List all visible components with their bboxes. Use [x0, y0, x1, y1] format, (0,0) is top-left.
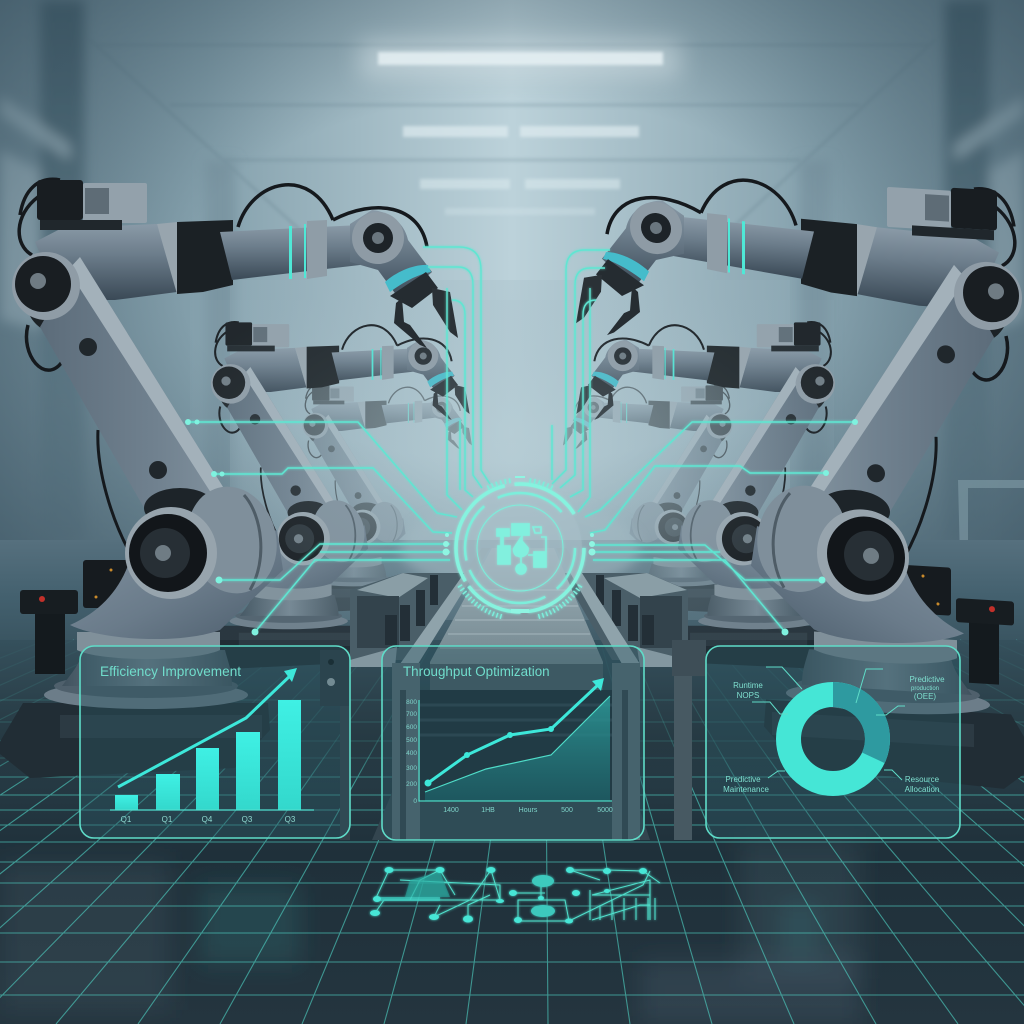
- left machinery: [350, 573, 470, 667]
- central AI hub: [456, 481, 584, 617]
- donut labels: Maintenance: [723, 785, 769, 794]
- horizontal traces, right: [585, 422, 855, 632]
- area and line chart: 700: [406, 711, 417, 718]
- main robot arm, right: [576, 165, 1024, 791]
- area and line chart: 500: [561, 807, 573, 814]
- network diagram on floor: [370, 867, 660, 924]
- donut callouts: [752, 667, 905, 780]
- panel: throughput optimization: [382, 646, 644, 840]
- donut labels: Predictive: [725, 775, 761, 784]
- conveyor rails: [400, 548, 640, 664]
- panel: efficiency improvement: [80, 646, 350, 838]
- donut labels: (OEE): [914, 692, 936, 701]
- donut labels: [723, 675, 945, 794]
- panel heading: Efficiency Improvement: [100, 664, 241, 679]
- area and line chart: 400: [406, 750, 417, 757]
- horizontal traces, left: [188, 422, 457, 632]
- bar chart: Q4: [202, 815, 213, 824]
- area and line chart: 200: [406, 781, 417, 788]
- middle robot arm, right: [576, 322, 845, 669]
- bar chart: Q1: [121, 815, 132, 824]
- area and line chart: 1400: [443, 807, 459, 814]
- panel heading: Throughput Optimization: [403, 664, 550, 679]
- donut labels: Runtime: [733, 681, 763, 690]
- main robot arm, left: [0, 179, 458, 778]
- bar chart: Q1: [162, 815, 173, 824]
- conveyor line: [320, 502, 706, 840]
- left wall pillars: [0, 0, 235, 540]
- donut labels: Allocation: [905, 785, 939, 794]
- donut labels: production: [911, 686, 939, 692]
- trend arrow: [118, 668, 297, 787]
- vertical traces, right: [552, 250, 610, 512]
- area and line chart: 600: [406, 724, 417, 731]
- area and line chart: 5000: [597, 807, 613, 814]
- conveyor belt: [430, 548, 603, 690]
- bar chart: Q3: [285, 815, 296, 824]
- factory hall background: [0, 0, 1024, 560]
- circuit traces to hub: [188, 247, 855, 632]
- donut labels: Predictive: [909, 675, 945, 684]
- area and line chart: 300: [406, 765, 417, 772]
- conveyor legs: [392, 663, 640, 840]
- panel: resource allocation: [706, 646, 960, 838]
- side table: [958, 480, 1024, 560]
- bar chart: [110, 700, 314, 824]
- bar chart: Q3: [242, 815, 253, 824]
- area and line chart: [406, 678, 613, 814]
- donut labels: NOPS: [737, 691, 759, 700]
- donut labels: Resource: [905, 775, 940, 784]
- right wall pillars: [800, 0, 1024, 540]
- area and line chart: 500: [406, 737, 417, 744]
- area and line chart: 0: [413, 798, 417, 805]
- area and line chart: Hours: [519, 807, 538, 814]
- area and line chart: 800: [406, 699, 417, 706]
- area and line chart: 1HB: [481, 807, 495, 814]
- background robot arm, left, far: [296, 385, 472, 613]
- background robot arm, right, far: [563, 385, 739, 613]
- ceiling beams: [90, 40, 935, 230]
- middle robot arm, left: [201, 322, 470, 669]
- vertical traces, left: [423, 247, 490, 510]
- ceiling lights: [360, 42, 680, 215]
- flowchart icon: [497, 524, 546, 574]
- floor with perspective grid: [0, 540, 1024, 1024]
- donut chart: [788, 694, 878, 784]
- right machinery: [562, 573, 688, 667]
